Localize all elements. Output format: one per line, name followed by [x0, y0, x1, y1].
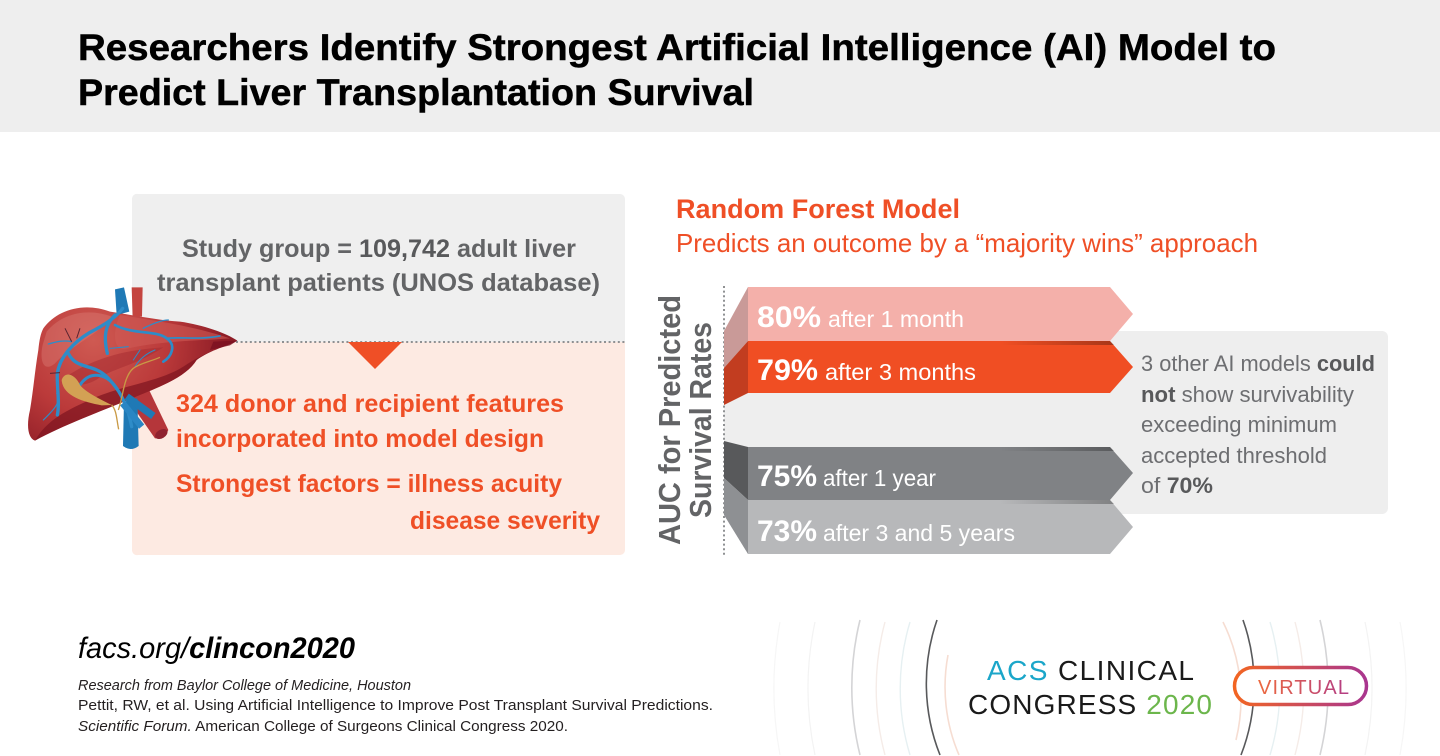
bar: 75% after 1 year: 75%	[757, 460, 817, 493]
panel: model features	[132, 342, 625, 555]
features text: disease severity	[410, 507, 600, 535]
website link: facs.org/clincon2020	[78, 632, 355, 665]
callout panel background	[724, 331, 1388, 514]
bar: 73% after 3 and 5 years	[724, 478, 1133, 554]
icon: down triangle	[348, 342, 402, 369]
title: Researchers Identify Strongest Artificial Intelligence (AI) Model to	[78, 27, 1276, 68]
features text: 324 donor and recipient features	[176, 390, 564, 418]
logo: virtual pill: VIRTUAL	[1258, 677, 1349, 699]
callout text: 3 other AI models could	[1141, 351, 1375, 376]
logo: ACS Clinical Congress 2020	[968, 655, 1212, 720]
panel: study group	[132, 194, 625, 342]
bar: 80% after 1 month: 80%	[757, 301, 821, 334]
title: Predict Liver Transplantation Survival	[78, 72, 754, 113]
dotted divider	[236, 341, 625, 343]
features text	[176, 390, 600, 535]
bar: 80% after 1 month	[724, 287, 1133, 368]
dotted axis line	[723, 286, 725, 555]
citation: Research from Baylor College of Medicine, Houston	[78, 678, 411, 694]
features text: Strongest factors = illness acuity	[176, 470, 562, 498]
header band	[0, 0, 1440, 132]
y axis label: Survival Rates	[683, 322, 718, 518]
bar: 79% after 3 months: 79%	[757, 354, 818, 387]
icon: liver illustration	[28, 287, 237, 449]
heading: random forest model: Random Forest Model	[676, 194, 960, 224]
logo: virtual pill	[1234, 668, 1366, 704]
study group text: transplant patients (UNOS database)	[157, 269, 600, 297]
bar: 75% after 1 year	[724, 441, 1133, 500]
y axis label: AUC for Predicted	[652, 295, 687, 545]
citation: Pettit, RW, et al. Using Artificial Intelligence to Improve Post Transplant Survival Predictions.	[78, 698, 713, 714]
bar: 75% after 1 year: after 1 year	[823, 465, 936, 491]
callout text: accepted threshold	[1141, 443, 1327, 468]
logo: ACS Clinical Congress 2020: CONGRESS 2020	[968, 689, 1212, 720]
title	[78, 27, 1276, 113]
bar: 73% after 3 and 5 years: after 3 and 5 years	[823, 520, 1015, 546]
callout text: of 70%	[1141, 473, 1213, 498]
citation	[78, 678, 713, 735]
study group text	[157, 235, 600, 297]
heading: random forest model	[676, 194, 1258, 258]
bar: 80% after 1 month: after 1 month	[828, 306, 964, 332]
gallbladder	[62, 375, 112, 405]
callout text: not show survivability	[1141, 382, 1354, 407]
callout text: exceeding minimum	[1141, 412, 1337, 437]
bar: 79% after 3 months: after 3 months	[825, 359, 976, 385]
citation: Scientific Forum. American College of Surgeons Clinical Congress 2020.	[78, 719, 568, 735]
bar: 79% after 3 months	[724, 341, 1133, 405]
callout text	[1141, 351, 1375, 498]
heading: random forest model: Predicts an outcome by a “majority wins” approach	[676, 228, 1258, 258]
y axis label	[652, 295, 718, 545]
bar: 73% after 3 and 5 years: 73%	[757, 515, 817, 548]
logo: concentric arcs	[774, 620, 1406, 755]
logo: ACS Clinical Congress 2020: ACS CLINICAL	[987, 655, 1194, 686]
vena cava top	[115, 287, 129, 315]
study group text: Study group = 109,742 adult liver	[182, 235, 576, 263]
blue vessels	[43, 308, 220, 427]
features text: incorporated into model design	[176, 425, 544, 453]
